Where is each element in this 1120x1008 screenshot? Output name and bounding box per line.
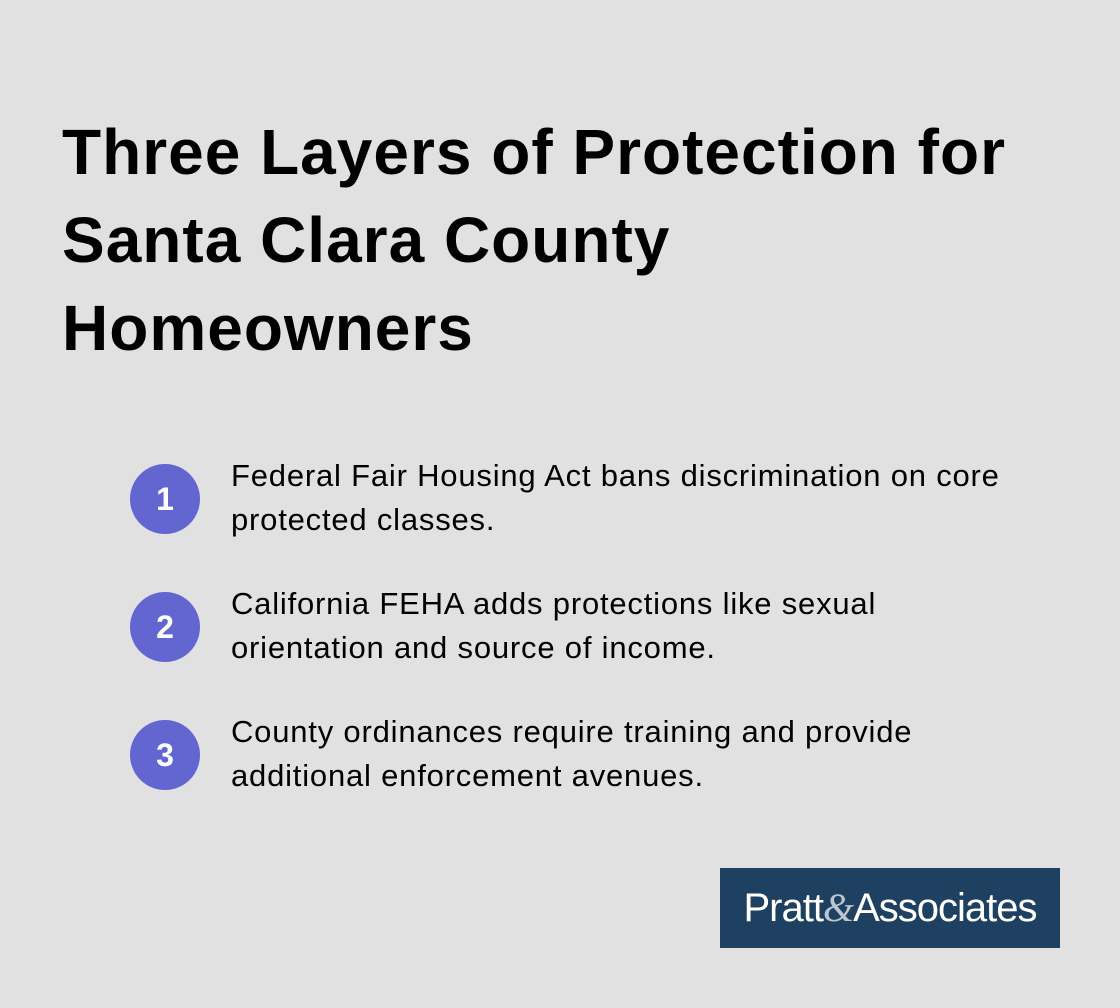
- text 1: Federal Fair Housing Act bans discrimination on core: [231, 458, 1000, 493]
- title: [62, 116, 1006, 364]
- title: Santa Clara County: [62, 204, 670, 276]
- text 3: County ordinances require training and provide: [231, 714, 912, 749]
- text 1: protected classes.: [231, 502, 495, 537]
- text 2: orientation and source of income.: [231, 630, 716, 665]
- text 3: additional enforcement avenues.: [231, 758, 704, 793]
- text 2: California FEHA adds protections like sexual: [231, 586, 876, 621]
- title: Three Layers of Protection for: [62, 116, 1006, 188]
- text 3: [231, 714, 912, 793]
- badge 2: [130, 592, 200, 662]
- item 1: [130, 458, 1000, 537]
- item 3: [130, 714, 912, 793]
- text 1: [231, 458, 1000, 537]
- badge 2: 2: [156, 609, 174, 645]
- item 2: [130, 586, 876, 665]
- logo: [720, 868, 1060, 948]
- badge 1: [130, 464, 200, 534]
- title: Homeowners: [62, 292, 474, 364]
- badge 3: [130, 720, 200, 790]
- text 2: [231, 586, 876, 665]
- badge 3: 3: [156, 737, 174, 773]
- badge 1: 1: [156, 481, 174, 517]
- logo: Pratt&Associates: [743, 885, 1037, 930]
